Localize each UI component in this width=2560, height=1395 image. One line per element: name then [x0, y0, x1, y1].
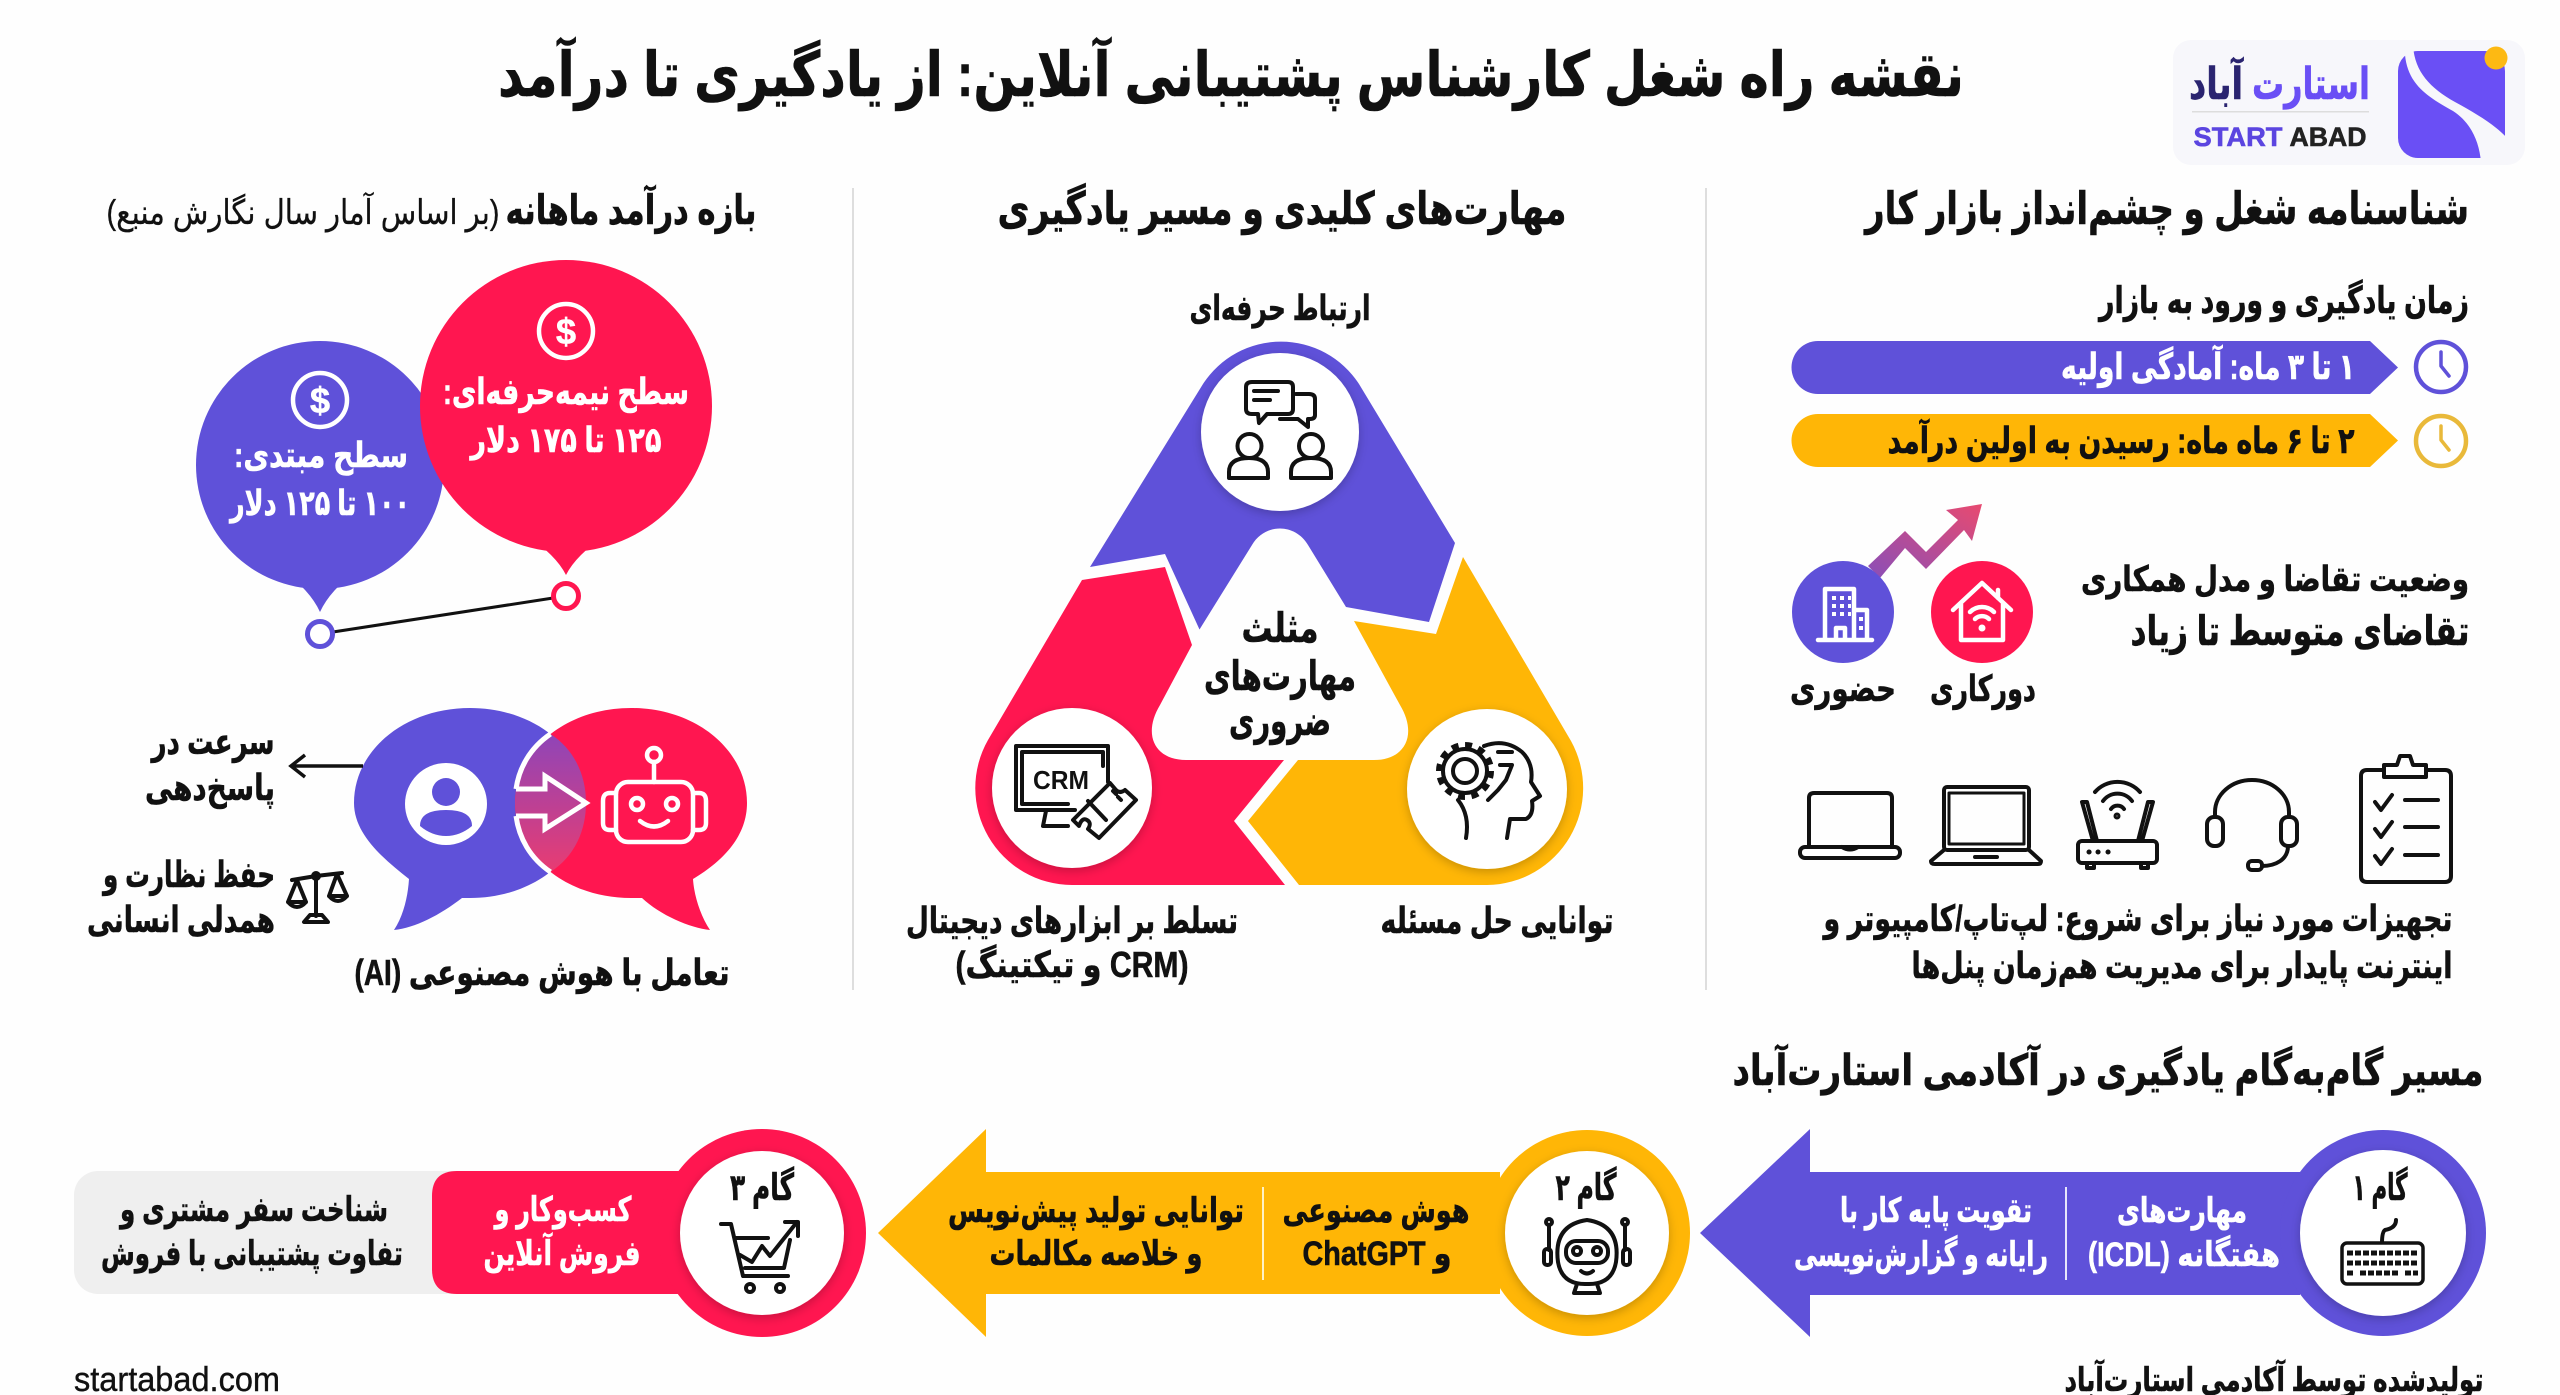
- step 2 skill text: [1282, 1192, 1470, 1274]
- text: human oversight: همدلی انسانی: [87, 899, 275, 940]
- icon: dollar semi-pro: $: [556, 311, 576, 352]
- bubbles: human and AI: [354, 708, 747, 930]
- icon: dollar semi-pro: [539, 304, 593, 358]
- step 1 arrow: [1700, 1129, 2486, 1337]
- icon: scales: [288, 873, 347, 922]
- step 3 skill text: کسب‌وکار و: [493, 1191, 632, 1230]
- heading: monthly income: [106, 185, 756, 234]
- bubble: semi-pro: [420, 260, 712, 575]
- icon: keyboard: [2342, 1220, 2423, 1284]
- icon: cart: [721, 1222, 798, 1292]
- step 3 skill text: فروش آنلاین: [484, 1232, 640, 1274]
- step 3 skill text: [484, 1191, 640, 1274]
- label: remote: دورکاری: [1930, 668, 2036, 710]
- step 2 arrow: [878, 1129, 1690, 1337]
- step 2 skill text: و ChatGPT: [1302, 1235, 1452, 1274]
- step 2 outcome text: [948, 1192, 1244, 1274]
- icon: robot: [603, 748, 706, 842]
- logo wordmark persian: آباد: [2189, 56, 2244, 109]
- bubble: beginner: [196, 341, 444, 612]
- step 1 outcome text: تقویت پایه کار با: [1840, 1192, 2032, 1231]
- skill segment: purple: [1090, 342, 1455, 630]
- label: onsite: حضوری: [1790, 668, 1896, 710]
- icon: brain gear: [1407, 709, 1567, 869]
- logo wordmark latin: ABAD: [2290, 122, 2366, 152]
- connector line: [308, 584, 578, 646]
- step 3 label: گام ۳: [730, 1166, 794, 1210]
- skill segment: yellow: [1248, 557, 1583, 885]
- label: problem solving: توانایی حل مسئله: [1380, 900, 1614, 942]
- text: response speed: سرعت در: [150, 721, 274, 763]
- timeline bar yellow: [1792, 414, 2398, 467]
- logo wordmark persian: [2189, 56, 2370, 110]
- icon: router: [2078, 782, 2157, 868]
- icon: thin laptop: [1800, 793, 1900, 858]
- center label: [1204, 605, 1356, 746]
- center label: ضروری: [1229, 698, 1331, 746]
- panel: job profile: [1790, 183, 2470, 987]
- icon: home wifi: [1931, 561, 2033, 663]
- text: human oversight: حفظ نظارت و: [102, 854, 275, 896]
- panel: income and AI: [87, 185, 756, 994]
- bubble: semi-pro: سطح نیمه‌حرفه‌ای:: [443, 371, 689, 413]
- logo wordmark persian: استارت: [2252, 60, 2370, 110]
- panel: learning path: [74, 1044, 2486, 1337]
- timeline bar purple: ۱ تا ۳ ماه: آمادگی اولیه: [2061, 344, 2355, 388]
- heading: monthly income: (بر اساس آمار سال نگارش منبع): [106, 192, 500, 233]
- text: human oversight: [87, 854, 275, 940]
- timeline bar yellow: ۲ تا ۶ ماه ماه: رسیدن به اولین درآمد: [1888, 418, 2355, 462]
- logo mark: [2398, 46, 2510, 162]
- icon: arrow human to AI: [516, 776, 586, 829]
- demand label: وضعیت تقاضا و مدل همکاری: [2081, 560, 2469, 600]
- step 1 label: گام ۱: [2352, 1166, 2408, 1210]
- skill segment: red: [975, 567, 1285, 885]
- label: digital tools: تسلط بر ابزارهای دیجیتال: [906, 900, 1238, 942]
- equipment text: [1822, 898, 2452, 987]
- icon: crm: [992, 708, 1152, 868]
- icon: communication: [1201, 353, 1359, 511]
- step 3 bar: [74, 1129, 866, 1337]
- step 2 label: گام ۲: [1556, 1166, 1617, 1210]
- icon: dollar beginner: [293, 373, 347, 427]
- text: response speed: پاسخ‌دهی: [145, 767, 275, 809]
- text: AI interaction: تعامل با هوش مصنوعی (AI): [355, 952, 730, 994]
- icon: user: [405, 763, 487, 845]
- label: digital tools: (CRM و تیکتینگ): [956, 944, 1188, 986]
- icon: robot head: [1544, 1219, 1630, 1293]
- logo wordmark latin: [2194, 122, 2366, 152]
- logo wordmark latin: START: [2194, 122, 2283, 152]
- label: communication: ارتباط حرفه‌ای: [1190, 289, 1370, 329]
- label: digital tools: [906, 900, 1238, 986]
- step 3 outcome text: تفاوت پشتیبانی با فروش: [101, 1235, 403, 1274]
- icon: clock yellow: [2416, 416, 2466, 466]
- icon: laptop: [1931, 787, 2041, 864]
- timeline bar purple: [1792, 341, 2398, 394]
- step 1 skill text: [2088, 1192, 2280, 1274]
- step 2 outcome text: توانایی تولید پیش‌نویس: [948, 1192, 1244, 1231]
- heading: key skills: مهارت‌های کلیدی و مسیر یادگیری: [998, 183, 1566, 235]
- panel: key skills: [906, 183, 1614, 986]
- step 3 outcome text: شناخت سفر مشتری و: [119, 1191, 388, 1230]
- icon: clipboard: [2361, 756, 2451, 882]
- logo: [2173, 40, 2525, 165]
- step 2 outcome text: و خلاصه مکالمات: [990, 1235, 1202, 1274]
- icon: office building: [1792, 561, 1894, 663]
- step 1 outcome text: [1794, 1192, 2048, 1275]
- arrow: response speed: [291, 755, 363, 777]
- center label: مثلث: [1242, 605, 1318, 651]
- icon: clock purple: [2416, 342, 2466, 392]
- step 1 skill text: مهارت‌های: [2117, 1192, 2247, 1231]
- heading: monthly income: بازه درآمد ماهانه: [506, 185, 756, 234]
- text: response speed: [145, 721, 275, 809]
- bubble: beginner: ۱۰۰ تا ۱۲۵ دلار: [229, 484, 410, 524]
- icon: crm: CRM: [1033, 765, 1089, 795]
- step 1 outcome text: رایانه و گزارش‌نویسی: [1794, 1235, 2048, 1275]
- icon: dollar beginner: $: [310, 380, 330, 421]
- growth arrow: [1868, 504, 1982, 578]
- bubble: semi-pro: ۱۲۵ تا ۱۷۵ دلار: [469, 421, 662, 461]
- center label: مهارت‌های: [1204, 653, 1356, 700]
- step 3 outcome text: [101, 1191, 403, 1274]
- step 1 skill text: هفتگانه (ICDL): [2088, 1235, 2280, 1274]
- step 2 skill text: هوش مصنوعی: [1282, 1192, 1470, 1231]
- bubble: beginner: سطح مبتدی:: [234, 436, 408, 476]
- title: نقشه راه شغل کارشناس پشتیبانی آنلاین: از یادگیری تا درآمد: [498, 36, 1964, 111]
- icon: headset: [2207, 780, 2297, 870]
